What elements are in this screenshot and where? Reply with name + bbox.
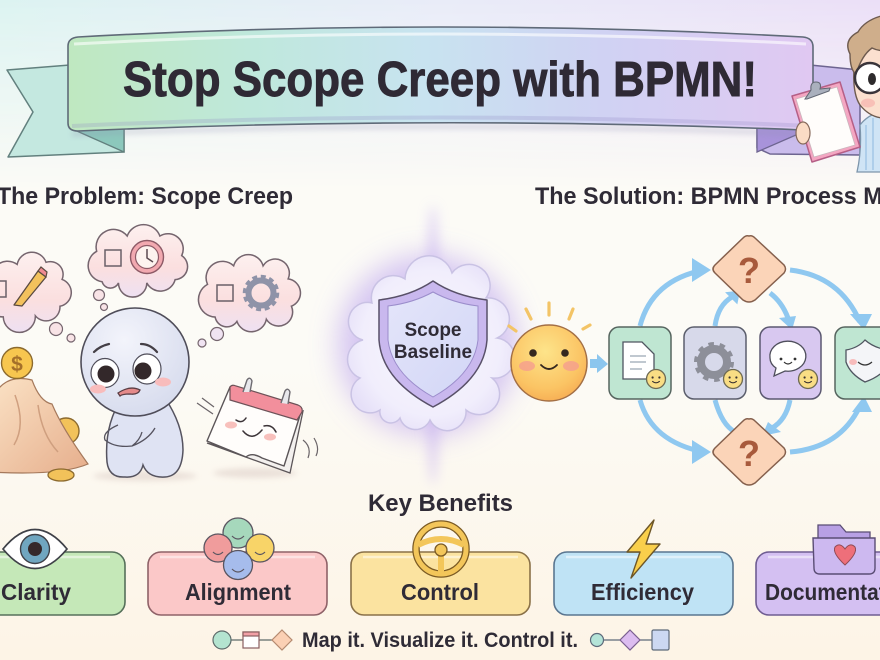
arrow: sun to process <box>590 354 608 373</box>
hand <box>796 122 810 144</box>
banner left tail <box>7 65 124 157</box>
thought bubbles: clock <box>94 290 108 310</box>
clipboard <box>792 82 860 162</box>
shield label: Baseline <box>394 342 472 363</box>
icon: eye <box>3 530 67 568</box>
benefit card: clarity <box>0 530 125 615</box>
character with clipboard <box>792 14 880 172</box>
title text: Stop Scope Creep with BPMN! <box>123 53 757 107</box>
panel: scope baseline <box>338 205 518 485</box>
banner highlight <box>74 34 806 44</box>
coin mound <box>0 348 88 481</box>
banner body <box>68 27 813 131</box>
icon: right mini flow <box>590 630 669 650</box>
clipboard clip <box>805 82 830 99</box>
smiling sun <box>509 303 590 401</box>
benefit card: documentation <box>756 525 880 615</box>
task: shield <box>835 327 880 399</box>
glasses <box>855 63 880 93</box>
benefit card: efficiency: Efficiency <box>591 579 694 605</box>
flow arrows <box>640 270 860 452</box>
hair <box>848 14 880 74</box>
icon: folder with heart <box>813 525 875 574</box>
shield label: Scope <box>404 320 462 341</box>
banner right tail <box>757 65 860 155</box>
thought bubbles: pencil <box>50 322 75 342</box>
banner lower shade <box>72 118 810 126</box>
icon: left mini flow <box>213 630 292 650</box>
panel: BPMN process flow <box>609 236 880 485</box>
gateway: bottom decision: ? <box>738 433 760 474</box>
clipboard paper <box>796 87 855 157</box>
task: document <box>609 327 671 399</box>
benefit card: clarity: Clarity <box>1 579 71 605</box>
thought cloud: pencil <box>0 252 71 332</box>
benefit card: control <box>351 524 530 615</box>
footer tagline <box>213 629 669 652</box>
thought cloud: gear <box>198 255 300 332</box>
banner shadow <box>72 126 810 134</box>
eye <box>868 73 876 85</box>
shirt <box>857 110 880 172</box>
benefit card: control: Control <box>401 579 479 605</box>
cheek <box>861 98 875 108</box>
task: gear <box>684 327 746 399</box>
benefit card: alignment <box>148 518 327 615</box>
tired calendar <box>197 378 318 478</box>
heading: key benefits: Key Benefits <box>368 490 513 517</box>
benefit card: efficiency <box>554 520 733 615</box>
gateway: bottom decision <box>713 419 786 485</box>
title banner <box>7 27 860 157</box>
glow <box>338 205 518 485</box>
arrowheads <box>692 258 872 464</box>
benefit card: alignment: Alignment <box>185 579 291 605</box>
worried character <box>81 308 197 481</box>
cloud <box>348 256 515 431</box>
head <box>854 40 880 118</box>
footer tagline: Map it. Visualize it. Control it. <box>302 629 578 652</box>
heading: the problem: The Problem: Scope Creep <box>0 183 293 210</box>
panel: scope creep problem <box>0 225 318 481</box>
icon: lightning bolt <box>627 520 660 578</box>
gateway: top decision <box>713 236 786 302</box>
shield <box>379 281 487 407</box>
icon: steering wheel <box>416 524 466 574</box>
coin mound: $ <box>11 353 23 376</box>
gateway: top decision: ? <box>738 250 760 291</box>
shield inner <box>388 292 478 397</box>
task: chat <box>760 327 821 399</box>
thought bubbles: gear <box>198 328 224 347</box>
thought cloud: clock <box>88 225 188 297</box>
icon: four faces <box>204 518 274 580</box>
